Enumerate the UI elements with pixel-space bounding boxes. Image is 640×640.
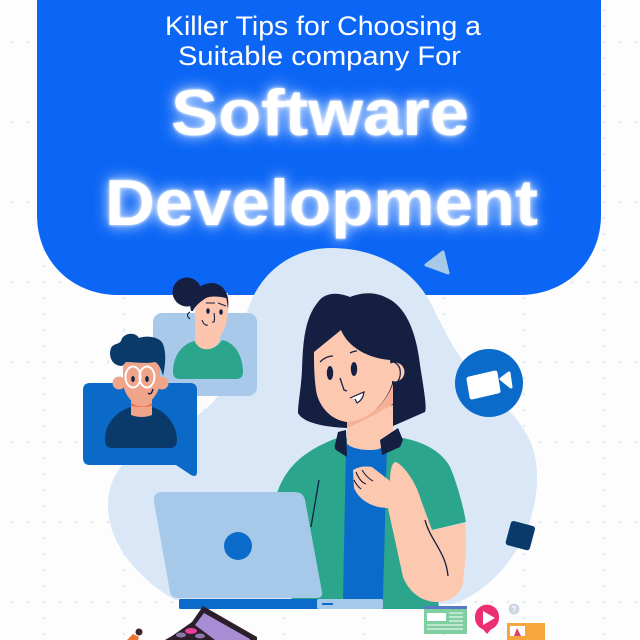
man body [105,407,177,448]
man head [110,334,168,417]
icon: dark square [505,520,536,551]
woman body [173,340,243,379]
calculator [165,606,257,640]
woman head [172,278,228,349]
collar [335,428,403,457]
laptop [154,492,383,609]
person card: man [83,334,197,476]
icon: orange card [507,623,545,640]
main woman [277,293,466,609]
icon: play button [475,605,499,634]
small person [127,628,142,640]
background blob [108,248,537,604]
laptop logo [224,532,252,560]
jacket [277,438,466,609]
arm and hand [353,462,466,602]
shirt [343,445,387,599]
facial features [320,351,364,403]
title: Software: Software [171,76,469,149]
icon: triangle [426,252,448,273]
person card: woman [153,278,257,396]
header panel [37,0,601,295]
laptop base [179,599,319,609]
icon: web window [424,606,467,634]
hair [298,293,426,428]
subtitle line 1: Killer Tips for Choosing a [165,11,481,41]
subtitle line 2: Suitable company For [178,41,461,71]
trackpad [317,599,383,609]
icon: question mark [508,604,520,614]
icon: question mark: ? [512,605,517,614]
icon: video camera badge [455,349,523,417]
title: Development: Development [105,166,538,239]
neck and face [347,405,393,450]
